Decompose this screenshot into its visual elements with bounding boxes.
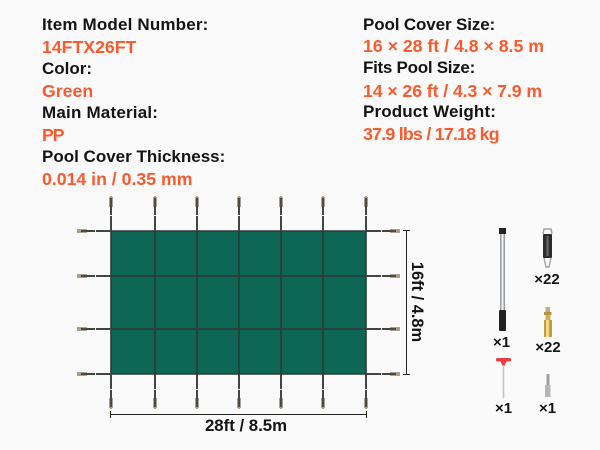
label: product weight: Product Weight: <box>363 102 496 121</box>
accessory: anchor quantity: ×22 <box>535 339 561 356</box>
value: color: Green <box>42 81 93 101</box>
label: pool cover size: Pool Cover Size: <box>363 15 495 34</box>
accessory: spring <box>543 229 552 267</box>
accessory: brass anchor <box>544 307 552 337</box>
label: fits pool size: Fits Pool Size: <box>363 58 475 77</box>
width dimension: 28ft / 8.5m <box>205 416 287 435</box>
accessory: metal bit <box>545 374 550 397</box>
value: weight: 37.9 lbs / 17.18 kg <box>363 124 499 144</box>
top anchor straps <box>110 196 368 231</box>
specs left column <box>42 15 225 189</box>
right anchor straps <box>366 230 400 376</box>
bottom anchor straps <box>110 374 368 409</box>
accessory: pole quantity: ×1 <box>493 334 510 351</box>
green cover panel <box>111 231 366 374</box>
height dimension <box>403 230 426 374</box>
accessory: spring quantity: ×22 <box>534 271 560 288</box>
strap grid <box>111 231 366 374</box>
accessory: red T-handle tool <box>496 358 511 398</box>
label: item model number: Item Model Number: <box>42 15 208 34</box>
value: cover size: 16 × 28 ft / 4.8 × 8.5 m <box>363 36 544 56</box>
pool cover diagram <box>77 196 400 409</box>
specs right column <box>363 15 544 144</box>
height dimension: 16ft / 4.8m <box>408 262 426 342</box>
accessory: bit quantity: ×1 <box>539 400 556 417</box>
accessory: tool quantity: ×1 <box>495 400 512 417</box>
width dimension <box>110 411 366 435</box>
label: thickness: Pool Cover Thickness: <box>42 147 225 166</box>
label: color: Color: <box>42 59 92 78</box>
value: pool size: 14 × 26 ft / 4.3 × 7.9 m <box>363 81 542 101</box>
value: model: 14FTX26FT <box>42 37 136 57</box>
value: thickness: 0.014 in / 0.35 mm <box>42 169 192 189</box>
accessory: pole <box>499 228 506 331</box>
label: main material: Main Material: <box>42 103 158 122</box>
left anchor straps <box>77 230 111 376</box>
value: material: PP <box>42 125 64 145</box>
